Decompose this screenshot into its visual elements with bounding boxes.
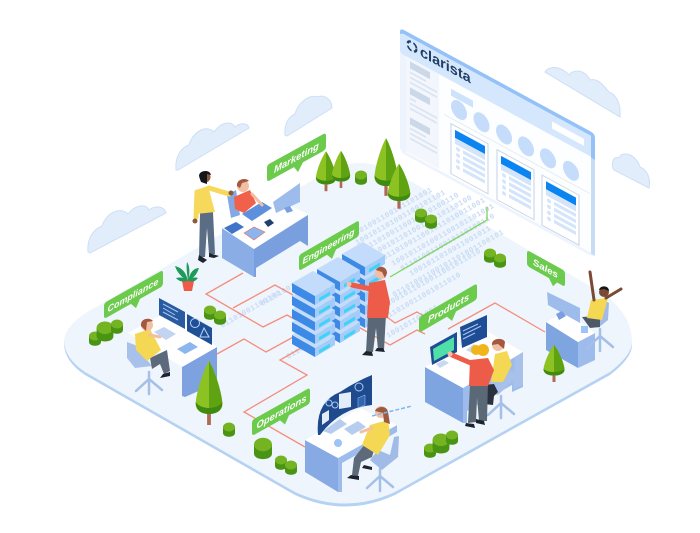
binary data streams: 1001011010011001011 xyxy=(408,225,493,279)
binary data streams: 0110100110010110100110 xyxy=(364,192,461,253)
cup xyxy=(581,326,588,333)
title bar xyxy=(451,89,473,108)
tall trees xyxy=(375,138,410,209)
label: Operations: Operations xyxy=(256,393,307,432)
cloud right xyxy=(612,154,650,188)
metric circles xyxy=(451,97,579,184)
products standing woman xyxy=(448,344,494,428)
binary data streams: 100101101001100101101001 xyxy=(390,203,496,269)
label: Compliance xyxy=(104,270,163,326)
curved dashboard monitor xyxy=(318,375,372,435)
dashboard window xyxy=(400,28,595,258)
monitor stand and keyboard xyxy=(323,419,366,435)
bushes near compliance xyxy=(89,306,226,346)
sales desk xyxy=(546,292,595,368)
binary data streams: 01101001100101 xyxy=(220,289,283,331)
potted plant xyxy=(175,262,199,291)
label: Products xyxy=(419,283,477,340)
logo text: clarista xyxy=(420,44,471,87)
cloud upper left xyxy=(176,123,249,170)
headset signal xyxy=(372,406,412,416)
binary data streams: 01101001100101101001100101 xyxy=(392,229,506,300)
label: Marketing: Marketing xyxy=(274,141,320,176)
products seated man xyxy=(484,339,523,418)
engineer standing xyxy=(346,267,390,356)
standing man yellow sweater xyxy=(192,171,234,263)
binary data streams: 1001011010011001011010 xyxy=(386,248,483,309)
search box xyxy=(552,122,584,146)
tablet xyxy=(177,342,198,354)
logo icon xyxy=(408,40,416,53)
code monitor xyxy=(460,315,487,348)
binary data streams xyxy=(220,187,506,362)
operations seated person xyxy=(347,406,412,491)
table one xyxy=(451,124,488,194)
label: Engineering xyxy=(299,220,359,278)
label: Sales xyxy=(527,250,565,293)
table two xyxy=(497,150,534,220)
table three xyxy=(542,175,579,245)
tree lower left xyxy=(196,361,222,425)
compliance seated person xyxy=(127,319,170,394)
label: Operations xyxy=(252,388,310,443)
monitor xyxy=(547,292,580,323)
keyboard xyxy=(154,327,176,340)
books xyxy=(224,222,244,234)
desk clock xyxy=(334,439,342,447)
binary data streams: 0110100 xyxy=(286,337,319,362)
binary data streams: 011010011001011010 xyxy=(382,272,463,323)
label: Marketing xyxy=(267,133,326,189)
circuit connection lines xyxy=(206,273,545,447)
server racks xyxy=(292,242,385,357)
trees near marketing xyxy=(316,151,350,191)
marketing seated person xyxy=(227,179,262,218)
products desk xyxy=(425,315,523,423)
binary data streams: 01101001100101101001 xyxy=(346,187,434,243)
compliance desk xyxy=(128,298,217,397)
keyboard mat xyxy=(242,202,272,221)
label: Products: Products xyxy=(428,292,469,326)
floor platform xyxy=(64,163,632,506)
cloud top right xyxy=(545,67,620,117)
sales cheering person xyxy=(582,272,621,351)
marketing desk xyxy=(222,183,308,277)
binary data streams: 100101101001100101101 xyxy=(354,189,448,248)
shape monitor xyxy=(187,314,212,345)
tree right xyxy=(544,345,564,382)
label: Compliance: Compliance xyxy=(108,276,159,315)
monitor xyxy=(273,183,300,213)
operations desk xyxy=(305,375,397,492)
label: Engineering: Engineering xyxy=(302,227,355,267)
label: Sales: Sales xyxy=(533,257,558,281)
green data monitor xyxy=(430,332,457,365)
binary data streams: 011010011001011010011001 xyxy=(382,197,487,263)
binary data streams: 100101101001 xyxy=(386,304,441,341)
cloud left xyxy=(88,206,166,253)
lone bush xyxy=(223,422,235,437)
desk phone xyxy=(264,219,274,227)
bushes near products xyxy=(424,430,458,458)
binary data streams: 10010110100110010110100 xyxy=(372,194,474,258)
bushes near operations xyxy=(254,438,297,475)
binary data streams: 0110100110010110100110 xyxy=(400,213,497,274)
sidebar menu xyxy=(410,61,437,154)
binary data streams: 011010011 xyxy=(260,280,302,309)
code monitor xyxy=(159,298,185,329)
green link from servers to dashboard xyxy=(390,207,487,277)
hedge bushes back xyxy=(355,170,506,268)
cloud centre xyxy=(285,96,332,136)
